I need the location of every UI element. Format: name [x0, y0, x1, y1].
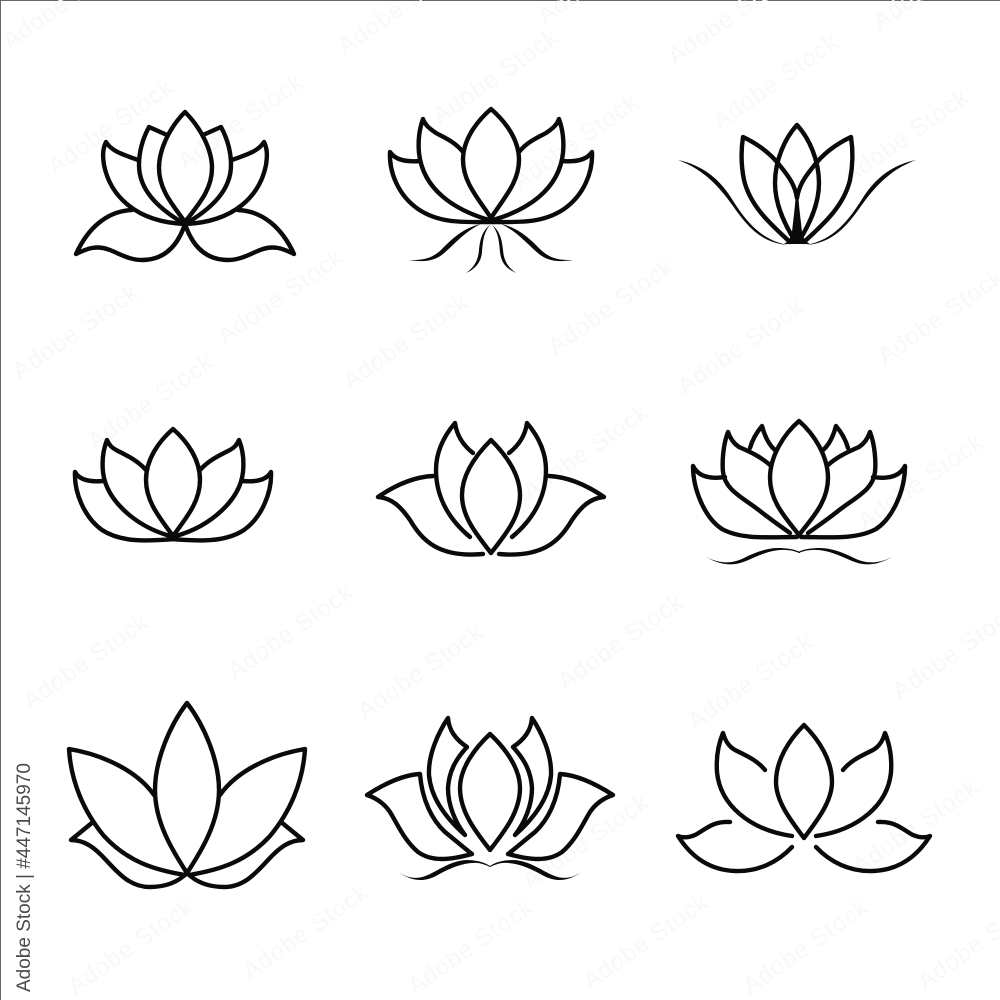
watermark pattern: Adobe Stock: [43, 73, 179, 180]
centre petal: [776, 725, 832, 838]
watermark pattern: Adobe Stock: [543, 253, 679, 360]
centre petal: [462, 440, 520, 553]
stock image id text: Adobe Stock | #447145970: [14, 763, 35, 992]
icon: lotus 6 with water: [693, 421, 905, 564]
centre petal: [463, 109, 519, 218]
watermark pattern: Adobe Stock: [63, 893, 199, 1000]
watermark pattern: Adobe Stock: [853, 428, 989, 535]
centre petal: [155, 703, 219, 873]
right petals and water: [798, 426, 905, 564]
watermark pattern: Adobe Stock: [518, 398, 654, 505]
watermark pattern: Adobe Stock: [83, 348, 219, 455]
watermark pattern: Adobe Stock: [8, 278, 144, 385]
watermark pattern: Adobe Stock: [238, 878, 374, 985]
right petals and water: [490, 718, 613, 880]
centre petal: [146, 429, 200, 536]
icon: lotus 2 with roots: [390, 109, 592, 273]
left petals: [678, 733, 792, 871]
watermark pattern: Adobe Stock: [338, 288, 474, 395]
right petals and roots: [491, 119, 592, 273]
centre petal: [770, 421, 828, 535]
watermark pattern: Adobe Stock: [428, 23, 564, 130]
watermark pattern: Adobe Stock: [673, 293, 809, 400]
watermark pattern: Adobe Stock: [738, 893, 874, 1000]
watermark pattern: Adobe Stock: [223, 578, 359, 685]
watermark pattern: Adobe Stock: [213, 243, 349, 350]
right petals: [185, 127, 294, 260]
left petals and roots: [390, 119, 491, 273]
left petals: [75, 440, 175, 540]
right petals: [816, 733, 930, 871]
watermark pattern: Adobe Stock: [18, 608, 154, 715]
right petal and blade: [797, 137, 916, 245]
left petals: [378, 423, 483, 555]
watermark pattern: Adobe Stock: [553, 588, 689, 695]
watermark pattern: Adobe Stock: [518, 788, 654, 895]
watermark pattern: Adobe Stock: [848, 773, 984, 880]
centre petal: [159, 112, 212, 222]
watermark pattern: Adobe Stock: [508, 88, 644, 195]
watermark pattern: Adobe Stock: [403, 893, 539, 1000]
left petal and blade: [678, 137, 797, 245]
right petals: [499, 423, 604, 555]
centre petal: [775, 125, 819, 241]
centre petal: [460, 734, 520, 850]
watermark pattern: Adobe Stock: [708, 28, 844, 135]
icon: lotus 5: [378, 423, 604, 555]
stem: [784, 192, 810, 244]
icon: lotus 9: [678, 725, 930, 871]
left petals and water: [693, 426, 800, 564]
left petals and water: [367, 718, 490, 880]
icon: lotus 1: [76, 112, 294, 260]
watermark pattern: Adobe Stock: [838, 83, 974, 190]
right petals: [171, 440, 271, 540]
icon: lotus 4: [75, 429, 271, 540]
watermark pattern: Adobe Stock: [353, 618, 489, 725]
icon: lotus 8 with water: [367, 718, 613, 880]
watermark pattern: Adobe Stock: [578, 888, 714, 995]
left petals: [76, 127, 185, 260]
left petals: [69, 749, 187, 887]
icon: lotus 3 with blades: [678, 125, 916, 245]
watermark pattern: Adobe Stock: [173, 68, 309, 175]
icon: lotus 7: [69, 703, 305, 887]
right petals: [187, 749, 305, 887]
watermark pattern: Adobe Stock: [683, 628, 819, 735]
